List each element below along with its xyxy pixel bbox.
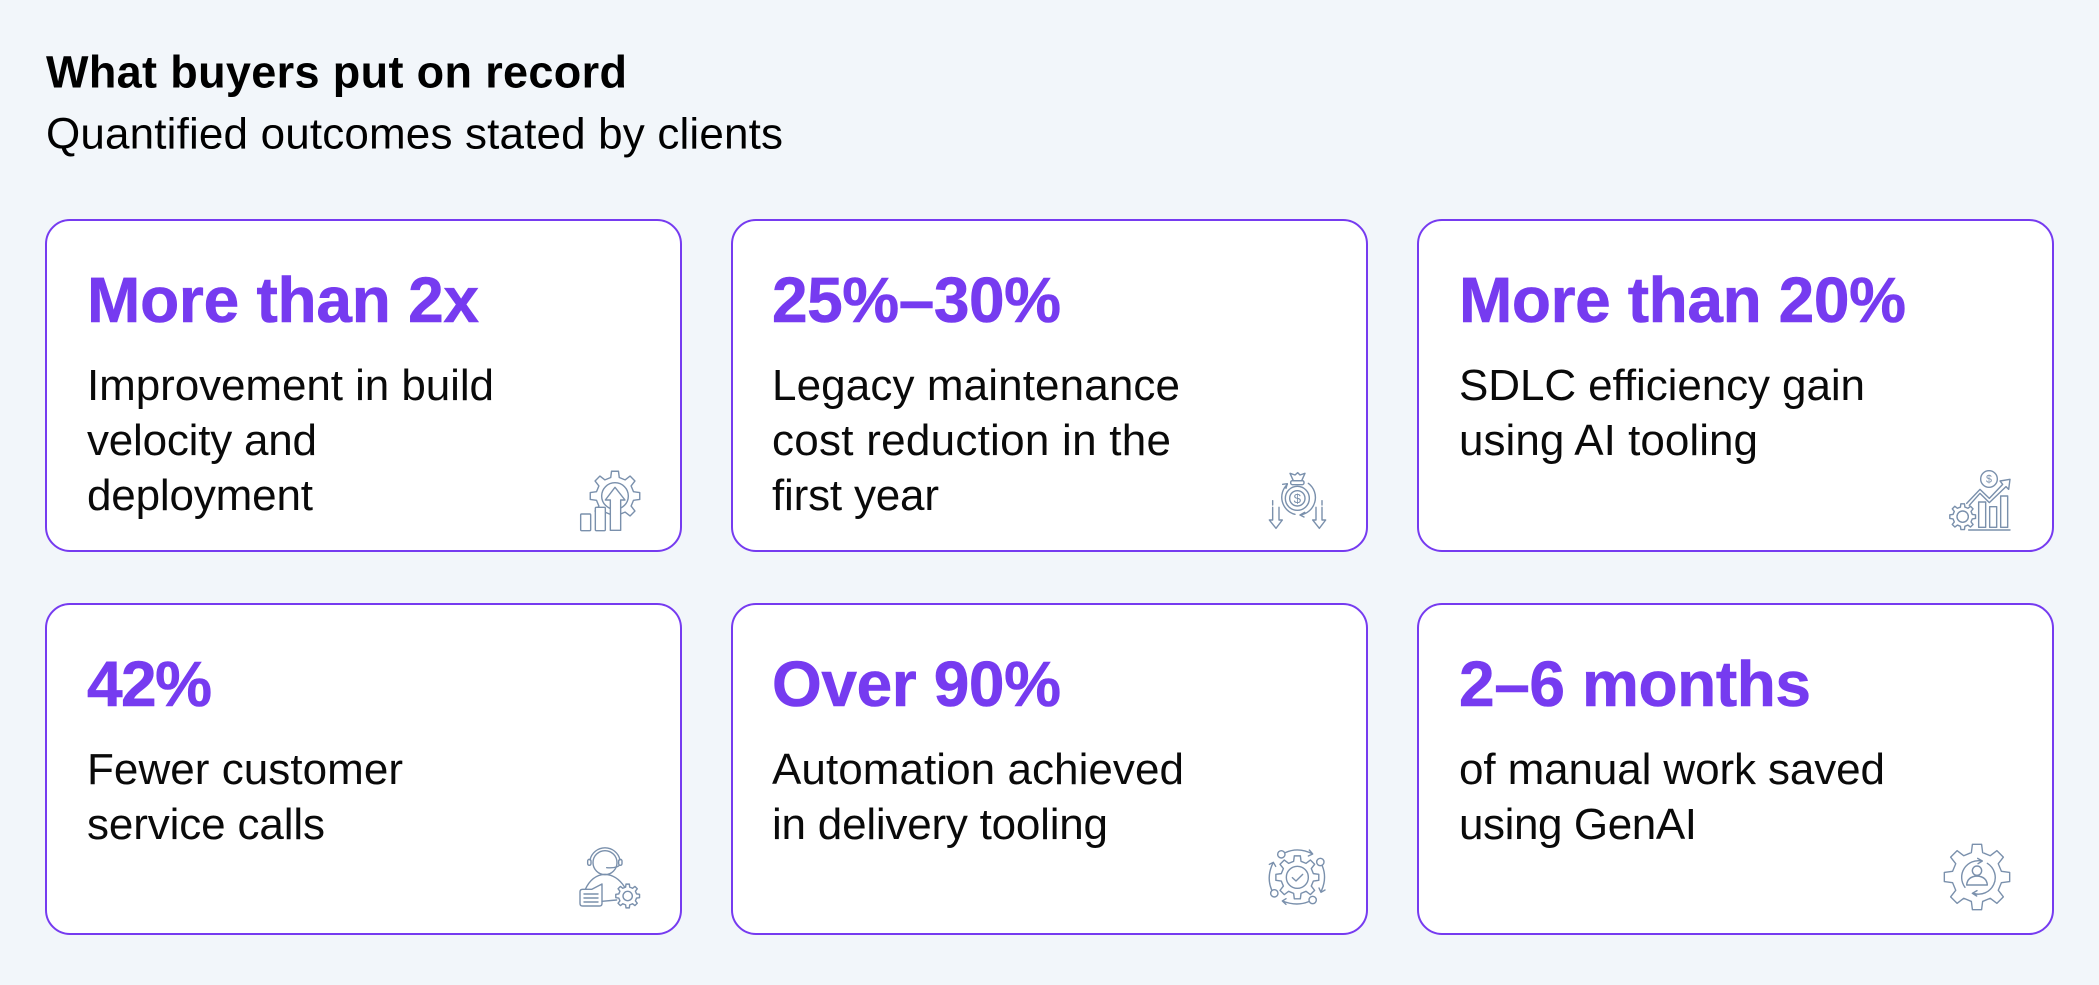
description: delivery automation: Automation achieved — [772, 745, 1184, 794]
description: build velocity: deployment — [87, 471, 313, 520]
stat: more than 2x: More than 2x — [87, 264, 479, 336]
description: legacy maintenance: cost reduction in the — [772, 416, 1171, 465]
icon: gear with person — [1944, 844, 2010, 910]
description: sdlc efficiency: SDLC efficiency gain — [1459, 361, 1865, 410]
icon: gear with rising bars — [581, 471, 640, 531]
stat: over 90 percent: Over 90% — [772, 648, 1061, 720]
description: customer service — [87, 745, 403, 849]
description: legacy maintenance: first year — [772, 471, 939, 520]
description: sdlc efficiency — [1459, 361, 1865, 465]
stat: 42 percent: 42% — [87, 648, 212, 720]
stat: 25 to 30 percent: 25%–30% — [772, 264, 1061, 336]
description: legacy maintenance — [772, 361, 1180, 520]
description: build velocity — [87, 361, 494, 520]
description: sdlc efficiency: using AI tooling — [1459, 416, 1758, 465]
title: What buyers put on record — [46, 46, 627, 98]
description: customer service: service calls — [87, 800, 325, 849]
description: build velocity: Improvement in build — [87, 361, 494, 410]
icon: support agent with gear — [580, 848, 640, 908]
panel: genai savings — [1418, 604, 2053, 934]
icon: chart with gear and coin — [1950, 471, 2010, 530]
panel: build velocity — [46, 220, 681, 551]
panel: sdlc efficiency — [1418, 220, 2053, 551]
stat: 2 to 6 months: 2–6 months — [1459, 648, 1811, 720]
description: delivery automation — [772, 745, 1184, 849]
description: customer service: Fewer customer — [87, 745, 403, 794]
description: legacy maintenance: Legacy maintenance — [772, 361, 1180, 410]
description: genai savings — [1459, 745, 1885, 849]
icon: money bag with down arrows — [1269, 473, 1326, 528]
stat: more than 20 percent: More than 20% — [1459, 264, 1906, 336]
subtitle: Quantified outcomes stated by clients — [46, 110, 783, 158]
icon: gear with check and cycle arrows — [1269, 850, 1325, 904]
panel: customer service — [46, 604, 681, 934]
description: genai savings: of manual work saved — [1459, 745, 1885, 794]
description: genai savings: using GenAI — [1459, 800, 1697, 849]
description: build velocity: velocity and — [87, 416, 317, 465]
description: delivery automation: in delivery tooling — [772, 800, 1108, 849]
panel: delivery automation — [732, 604, 1367, 934]
icon: money bag with down arrows: $ — [1294, 491, 1302, 506]
panel: legacy maintenance — [732, 220, 1367, 551]
icon: chart with gear and coin: $ — [1986, 474, 1992, 486]
